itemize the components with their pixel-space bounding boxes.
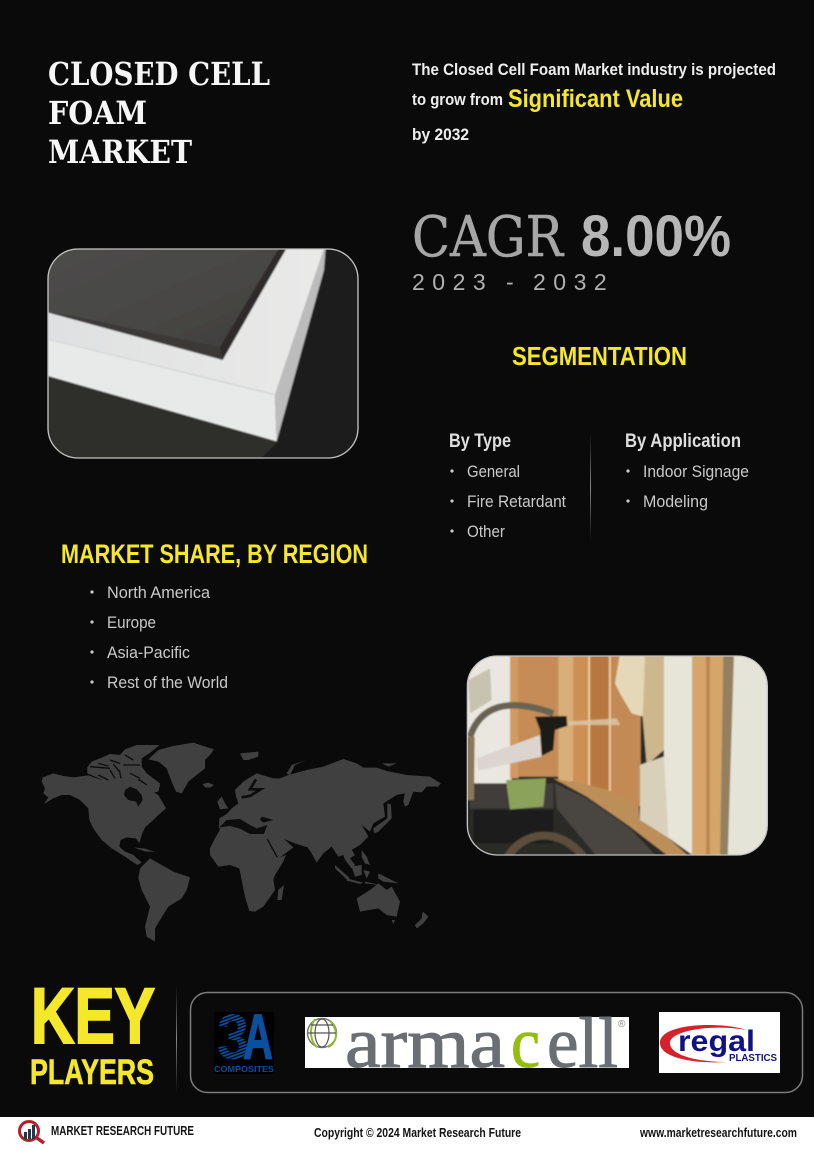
segment list: by application: By Application: [625, 431, 741, 452]
key players heading: [30, 971, 155, 1092]
segmentation heading: SEGMENTATION: [512, 341, 687, 371]
title: MARKET: [48, 133, 192, 171]
title: CLOSED CELL: [48, 55, 270, 93]
logo: armacell: c: [511, 1003, 540, 1083]
logo: 3A Composites: A: [243, 1001, 273, 1073]
region list: Rest of the World: [107, 673, 228, 692]
segment list: by type: [449, 431, 566, 541]
region list: Asia-Pacific: [107, 643, 190, 662]
world map: [42, 743, 441, 942]
footer bar: Copyright © 2024 Market Research Future: [314, 1126, 521, 1140]
footer bar: MARKET RESEARCH FUTURE: [51, 1124, 194, 1138]
segment list: by type: Other: [467, 522, 505, 541]
CAGR figure: -: [506, 269, 521, 295]
region list: [90, 583, 228, 692]
CAGR figure: 2023: [412, 269, 493, 295]
logo: armacell: arma: [345, 1003, 505, 1083]
logo: regal plastics: PLASTICS: [729, 1053, 777, 1064]
photo: spray foam insulation: [463, 653, 773, 860]
logo: 3A Composites: 3: [217, 1001, 249, 1073]
region list: North America: [107, 583, 211, 602]
CAGR figure: [412, 204, 731, 295]
key players heading: KEY: [31, 971, 155, 1060]
logo: regal plastics: regal: [678, 1025, 755, 1058]
key players heading: PLAYERS: [30, 1053, 154, 1092]
logo: 3A Composites: COMPOSITES: [214, 1064, 274, 1074]
segment list: by type: By Type: [449, 431, 511, 452]
segment list: by application: Indoor Signage: [643, 462, 749, 481]
CAGR figure: 2032: [533, 269, 614, 295]
market projection text: Significant Value: [508, 85, 683, 113]
region list: Europe: [107, 613, 156, 632]
CAGR figure: CAGR: [412, 205, 565, 270]
logo: armacell: ®: [618, 1019, 626, 1030]
segment list: by application: Modeling: [643, 492, 708, 511]
logo: 3A Composites: [214, 1001, 274, 1074]
logo: armacell: ell: [547, 1003, 618, 1083]
market projection text: by 2032: [412, 125, 469, 144]
icon: market research future logo: [20, 1122, 44, 1143]
key players panel: [190, 992, 802, 1092]
market projection text: [412, 60, 776, 144]
CAGR figure: 8.00%: [581, 204, 731, 269]
segment list: by type: Fire Retardant: [467, 492, 566, 511]
photo: foam sheets: [43, 243, 363, 463]
market share heading: MARKET SHARE, BY REGION: [61, 539, 368, 569]
market projection text: The Closed Cell Foam Market industry is projected: [412, 60, 776, 79]
market projection text: to grow from: [412, 90, 503, 109]
segment list: by type: General: [467, 462, 520, 481]
logo: regal plastics: [659, 1012, 780, 1073]
title: FOAM: [48, 94, 147, 132]
title: [48, 55, 270, 171]
segment list: by application: [625, 431, 749, 511]
logo: armacell: [305, 1003, 629, 1083]
footer bar: [0, 1117, 814, 1150]
